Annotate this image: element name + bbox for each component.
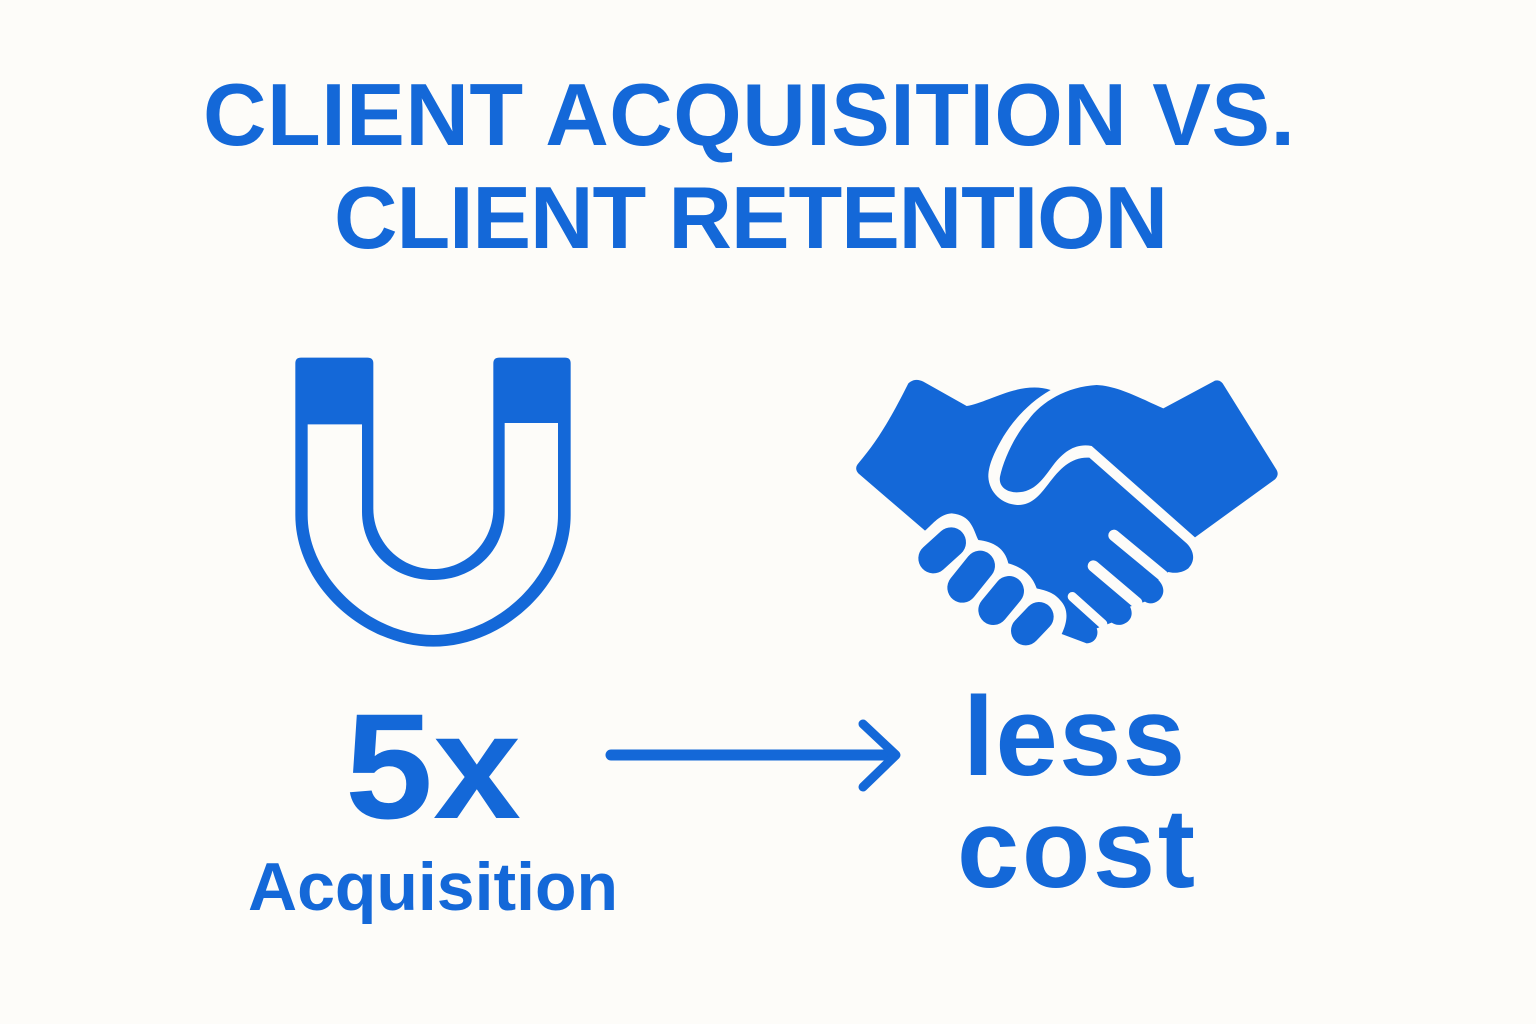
icon: handshake [856,380,1278,643]
finger 4 [1026,617,1039,631]
title: CLIENT RETENTION [334,168,1168,267]
text: less cost [957,674,1195,911]
title: CLIENT ACQUISITION VS. [203,65,1295,164]
icon: magnet [295,358,571,647]
finger 3 [993,591,1009,610]
arrow [611,724,896,787]
finger 1 [933,542,951,558]
text: less cost: cost [957,786,1195,911]
stat: 5x: 5x [345,682,521,850]
label: Acquisition: Acquisition [248,849,618,925]
finger slots [1072,535,1163,624]
title [203,65,1295,267]
finger 2 [962,566,980,588]
text: less cost: less [963,674,1185,799]
